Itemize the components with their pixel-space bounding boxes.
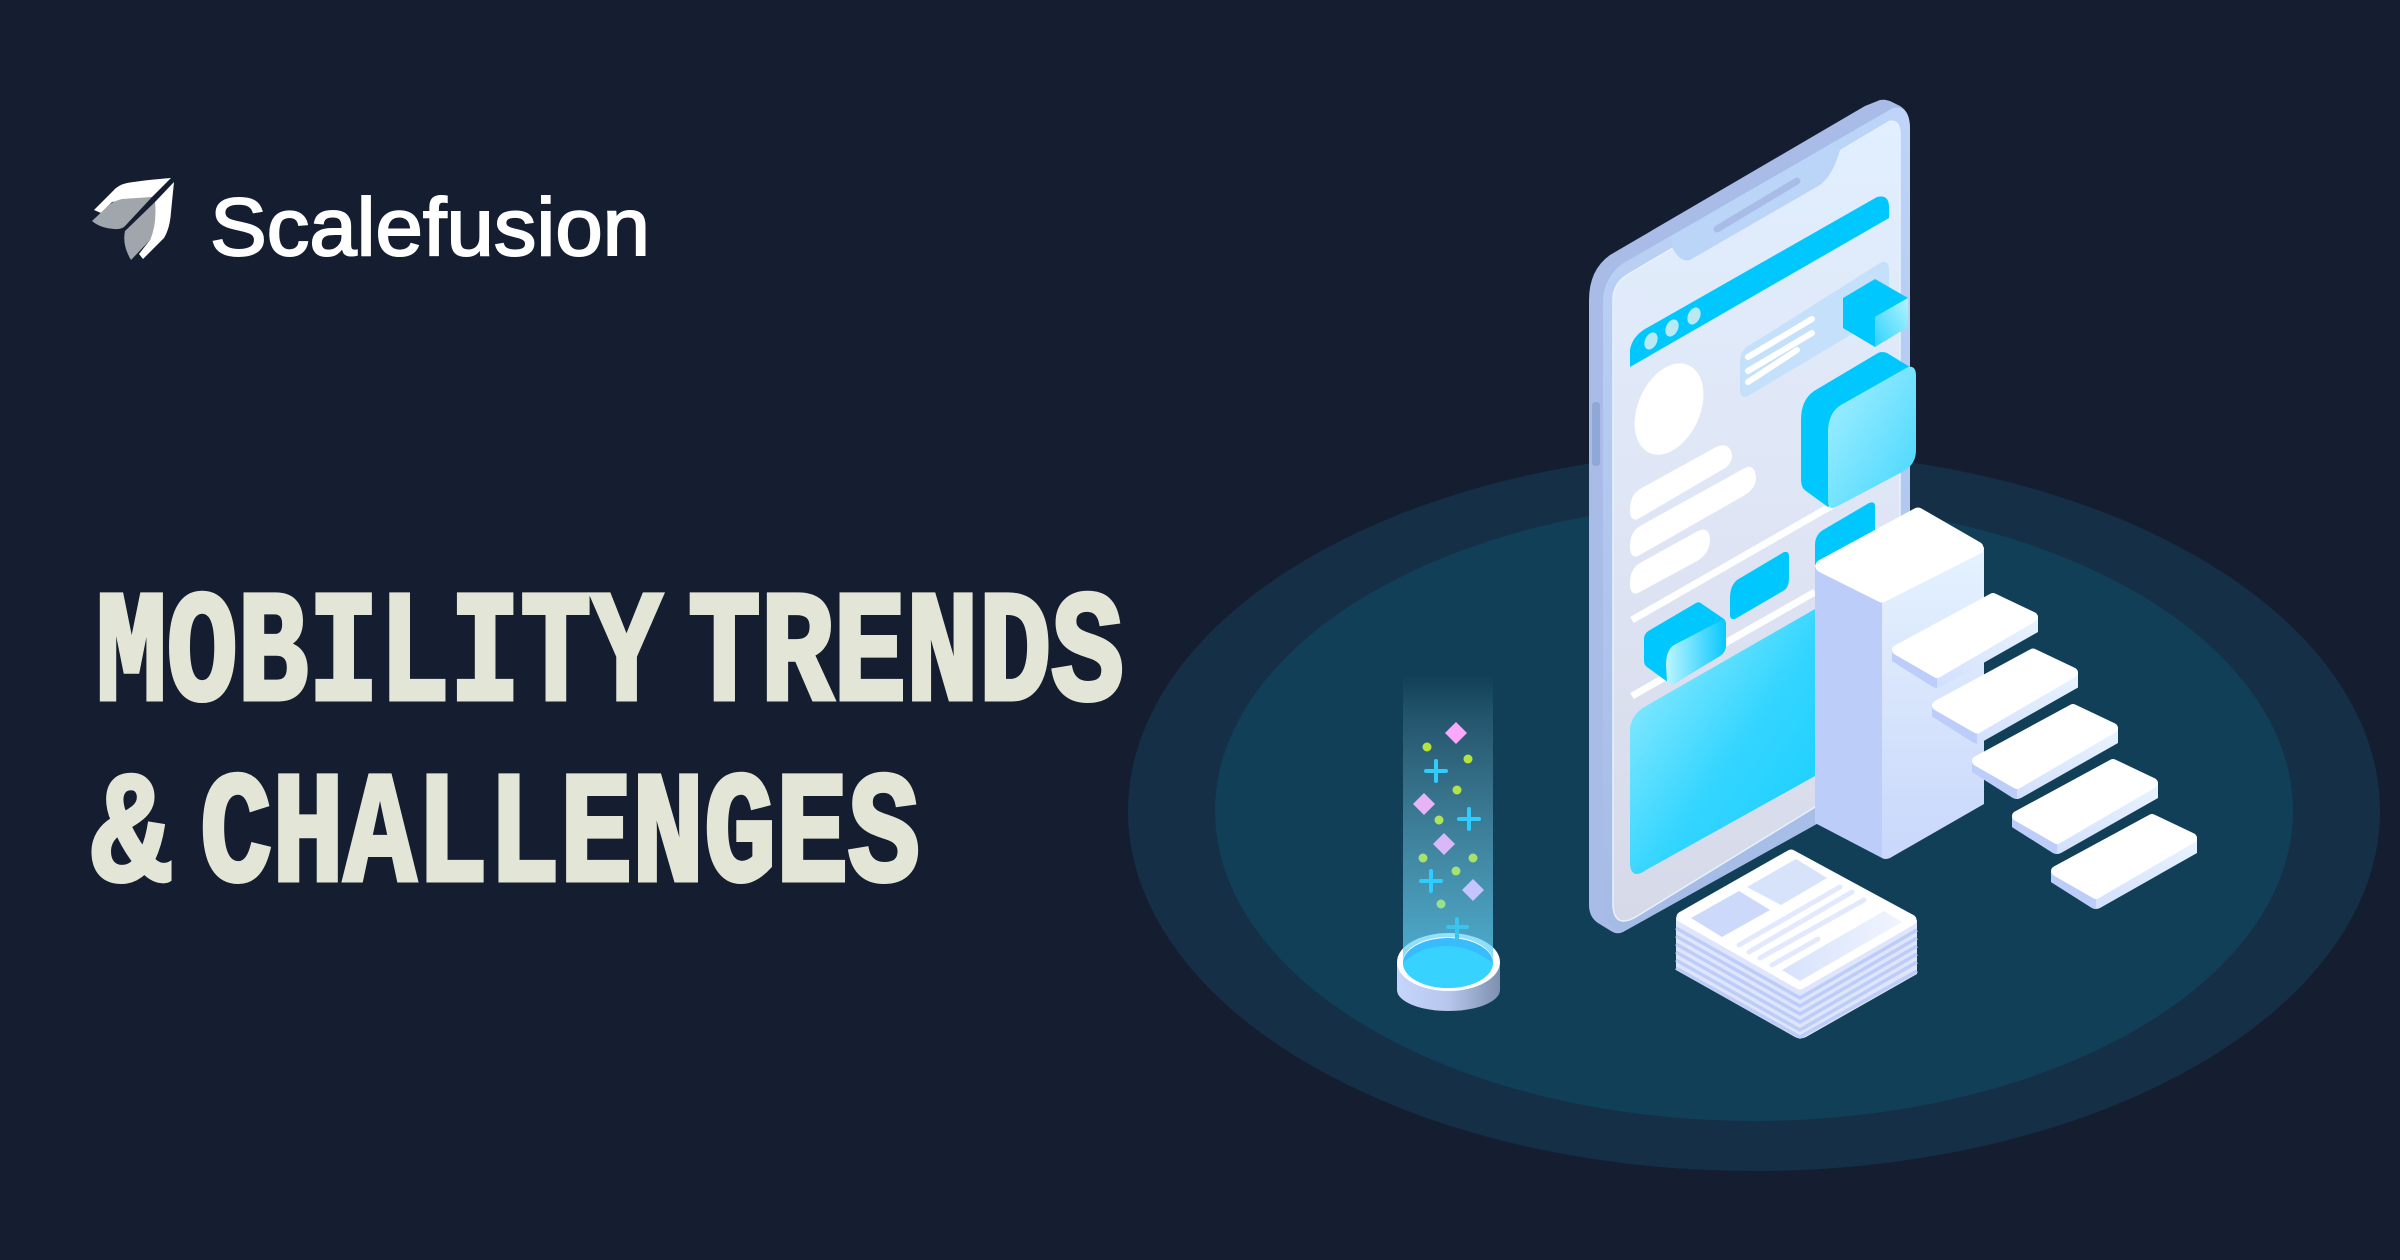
small blue tile: [1730, 552, 1789, 619]
step 5: [2051, 819, 2197, 909]
side button: [1592, 402, 1600, 466]
block tower: [1815, 514, 1984, 859]
card text lines: [1748, 319, 1812, 382]
document stack: [1676, 855, 1917, 1038]
step 4: [2012, 764, 2158, 854]
logo: [92, 178, 650, 273]
top blue tile: [1815, 502, 1875, 565]
step 3: [1972, 709, 2118, 799]
stack sides: [1676, 917, 1917, 1038]
sheet text lines: [1739, 887, 1864, 965]
screen: [1613, 121, 1900, 921]
wordmark: Scalefusion: [210, 182, 650, 273]
floating large cube: [1801, 352, 1916, 508]
beam device: [1397, 675, 1500, 1011]
sheet panels: [1747, 859, 1827, 905]
phone: [1589, 100, 1910, 933]
icon: Scalefusion mark: [92, 178, 174, 260]
speaker: [1717, 181, 1797, 229]
block right face: [1882, 547, 1984, 859]
phone face: [1603, 107, 1910, 931]
title line 1: TRENDS: [688, 568, 1124, 747]
floating small rounded cube: [1644, 602, 1726, 684]
title line 1: MOBILITY: [96, 568, 662, 747]
title line 2: CHALLENGES: [200, 749, 920, 928]
text pills: [1630, 445, 1756, 594]
image panel: [1630, 609, 1815, 874]
floating small cube: [1843, 279, 1908, 347]
block left face: [1815, 567, 1882, 858]
block top: [1822, 514, 1977, 596]
phone back edge: [1589, 100, 1910, 933]
title line 2: &: [92, 749, 170, 928]
title: [92, 568, 1124, 928]
steps: [1892, 598, 2197, 909]
particles: [1413, 722, 1484, 938]
info card: [1740, 262, 1889, 397]
notch: [1672, 115, 1892, 260]
browser bar: [1630, 196, 1889, 367]
divider lines: [1632, 478, 1880, 696]
step 1: [1892, 598, 2038, 688]
avatar: [1621, 353, 1717, 465]
step 2: [1932, 654, 2078, 744]
platform: outer ellipse: [1128, 451, 2380, 1171]
cylinder base: [1397, 933, 1500, 1011]
light beam: [1403, 675, 1493, 962]
stack top sheet: [1682, 855, 1911, 984]
platform: inner ellipse: [1215, 501, 2293, 1121]
title line 2: [92, 749, 920, 928]
browser dots: [1642, 305, 1703, 352]
